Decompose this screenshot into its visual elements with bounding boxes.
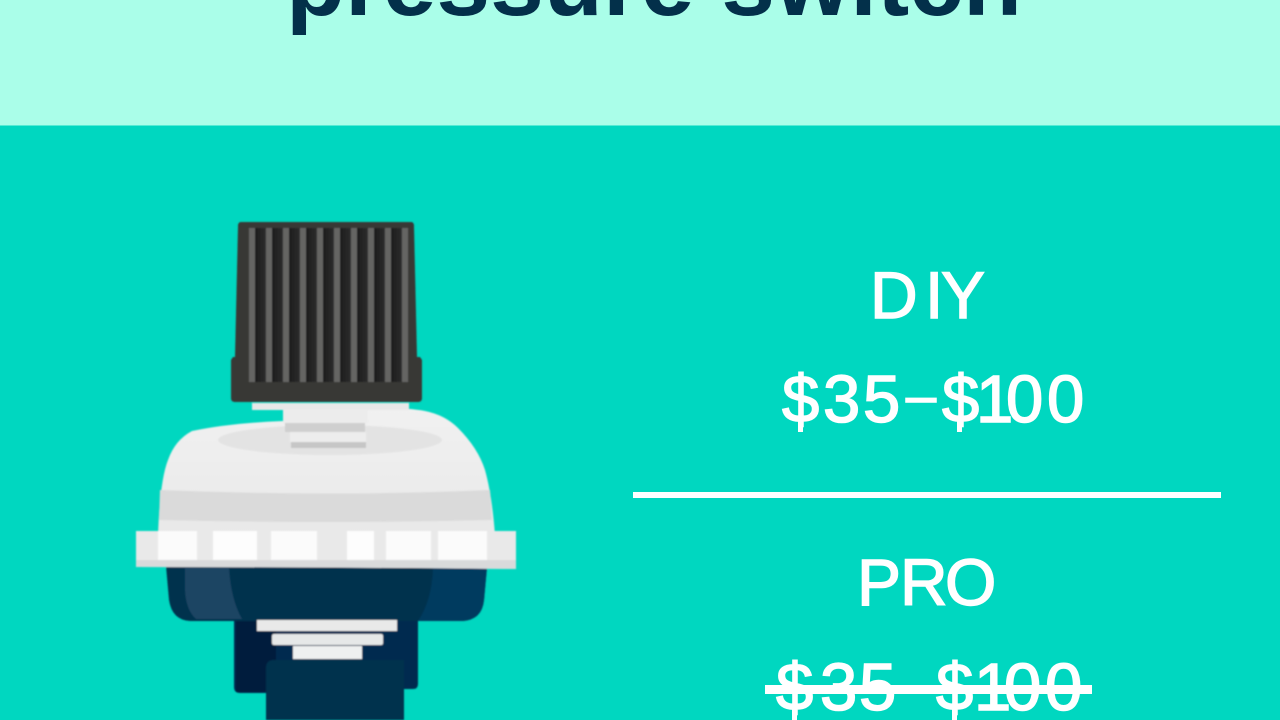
lower navy block	[234, 618, 418, 693]
dollar sign tails	[792, 708, 797, 720]
strikethrough line	[765, 685, 1092, 694]
DIY label: DIY	[870, 258, 985, 332]
DIY price: $100	[942, 362, 1084, 437]
housing left highlight	[185, 568, 242, 619]
header panel: pale mint band	[0, 0, 1280, 126]
dome shaded band	[159, 490, 492, 522]
lower navy block shadow	[236, 620, 276, 692]
PRO struck-through price: –	[899, 654, 929, 714]
divider line	[633, 492, 1221, 498]
navy housing	[166, 566, 487, 621]
PRO struck-through price	[765, 650, 1092, 720]
knob collar plate	[252, 403, 409, 410]
black ribbed knob	[231, 222, 422, 402]
washers	[257, 620, 397, 659]
DIY price: –	[906, 366, 936, 426]
PRO label: PRO	[857, 545, 996, 619]
ribs	[249, 228, 408, 382]
threaded neck	[283, 410, 368, 448]
housing right highlight	[418, 568, 487, 621]
illustration: pressure switch	[136, 222, 516, 720]
white dome	[158, 408, 495, 535]
rib gaps	[255, 228, 402, 382]
navy stem	[266, 660, 404, 720]
collar flange	[136, 531, 516, 569]
DIY price: $35	[782, 362, 900, 437]
dollar sign tails	[798, 420, 803, 432]
knob body	[231, 222, 422, 402]
DIY price	[782, 362, 1084, 437]
dome top recess	[218, 425, 442, 455]
